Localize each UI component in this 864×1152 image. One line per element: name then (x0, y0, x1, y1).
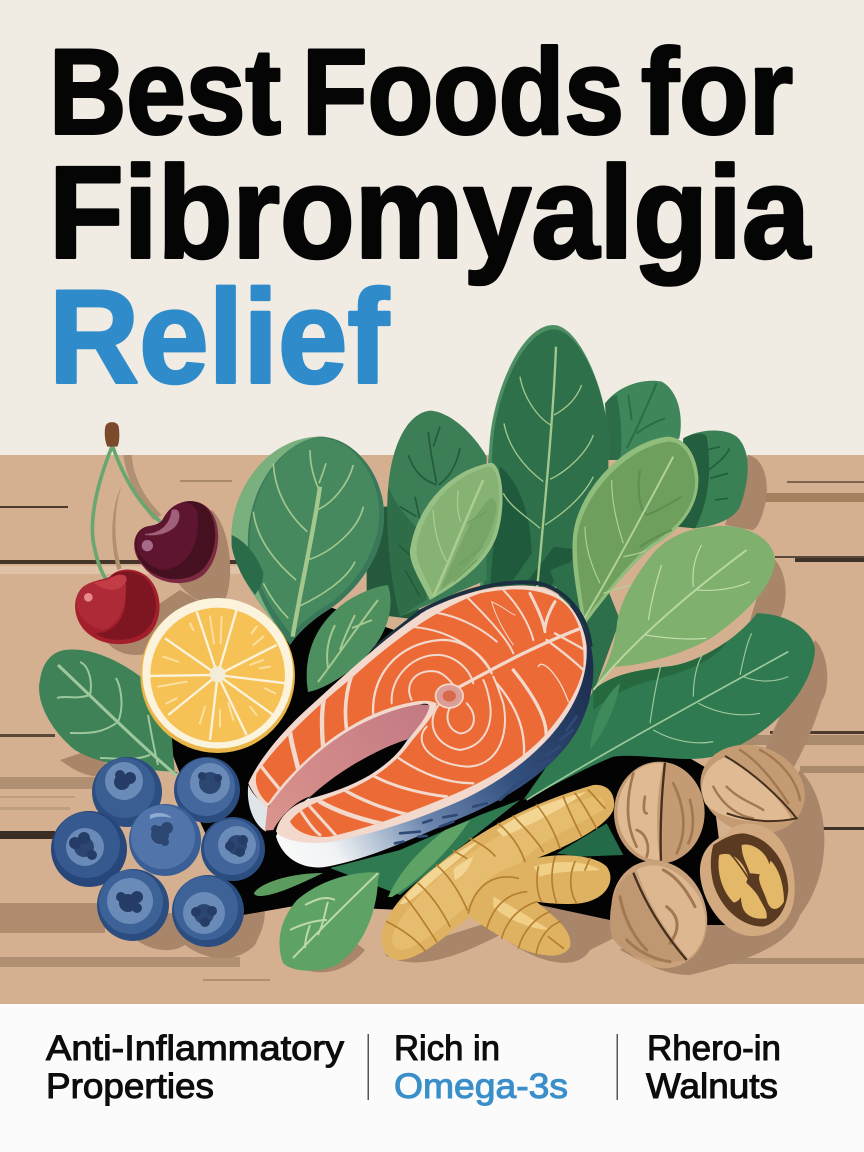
red cherry (75, 570, 160, 644)
blueberry 6 (97, 869, 169, 941)
dark green under salmon (330, 800, 520, 895)
leaf: light green centre left (410, 463, 503, 600)
salmon orange flesh (256, 589, 584, 837)
blueberry 2 (174, 757, 240, 823)
leaf: lower dark right (523, 613, 815, 800)
walnut 2 (688, 730, 818, 848)
thin green leaf (388, 820, 470, 897)
title (49, 24, 811, 412)
leaves right cluster (523, 437, 815, 800)
footer item: omega-3s (394, 1029, 568, 1106)
footer item: walnuts: Rhero-in (647, 1029, 781, 1068)
blueberry 4 (129, 804, 201, 876)
table shadows (60, 455, 827, 975)
title line 2: Fibromyalgia (49, 138, 811, 286)
blueberry 1 (92, 757, 162, 827)
footer item: anti-inflammatory (46, 1029, 345, 1106)
leaf: far left (39, 649, 178, 775)
blueberry 5 (201, 817, 265, 881)
walnut 4 opened (700, 824, 795, 936)
salmon dark upper edge (373, 582, 591, 650)
thin leaf (254, 873, 323, 896)
walnut 1 (614, 762, 705, 864)
cherries and lemon (75, 422, 295, 753)
title line 3: Relief (49, 264, 390, 412)
bottom leaf (280, 872, 380, 971)
salmon flesh lines (257, 590, 585, 837)
leaf: back right (605, 381, 681, 463)
footer strip (0, 1004, 864, 1152)
cherry knob (105, 422, 119, 447)
footer item: walnuts (646, 1029, 781, 1106)
cherry stem shadow (112, 455, 162, 570)
ginger root and walnuts (382, 730, 818, 983)
blueberry 3 (51, 811, 127, 887)
salmon steak (248, 582, 593, 867)
leaf: lightest right (593, 526, 775, 690)
footer item: walnuts: Walnuts (646, 1067, 778, 1106)
leaves left cluster (231, 411, 503, 645)
blueberry 7 (172, 875, 244, 947)
leaf: large centre back (480, 325, 608, 587)
leaf: small beside salmon (307, 585, 391, 692)
footer item: omega-3s: Rich in (394, 1029, 500, 1068)
salmon spine centre (435, 683, 464, 709)
leaf: far right back (677, 430, 748, 528)
leaves back cluster (480, 325, 748, 587)
footer item: anti-inflammatory: Anti-Inflammatory (46, 1029, 345, 1068)
leaf: big upper left (231, 437, 384, 645)
dark cherry (134, 501, 218, 583)
leaf: large light right (572, 437, 698, 627)
footer item: anti-inflammatory: Properties (46, 1067, 214, 1106)
blueberries (51, 757, 265, 947)
black background under food (165, 600, 730, 925)
salmon slit (308, 739, 407, 799)
ginger root (382, 785, 614, 960)
leaf: left back dark (387, 411, 487, 617)
footer item: omega-3s: Omega-3s (394, 1067, 568, 1106)
salmon face (248, 585, 587, 843)
salmon scales (395, 717, 577, 843)
title line 1: Foods (302, 24, 624, 160)
lemon (140, 598, 295, 753)
green patch behind ginger (557, 823, 623, 857)
title line 1 (49, 24, 793, 160)
walnut 3 (595, 846, 723, 983)
title line 1: for (641, 24, 793, 160)
cherry stems (92, 447, 163, 585)
wooden table (0, 455, 864, 1004)
salmon skin (276, 603, 593, 867)
salmon belly cavity (265, 704, 429, 831)
leaf: bottom with thin leaves (254, 800, 520, 971)
dark fill behind big leaf (367, 507, 420, 620)
green fill beside salmon (550, 553, 620, 693)
title line 1: Best (49, 24, 281, 160)
salmon left side (248, 785, 268, 832)
background wall (0, 0, 864, 456)
